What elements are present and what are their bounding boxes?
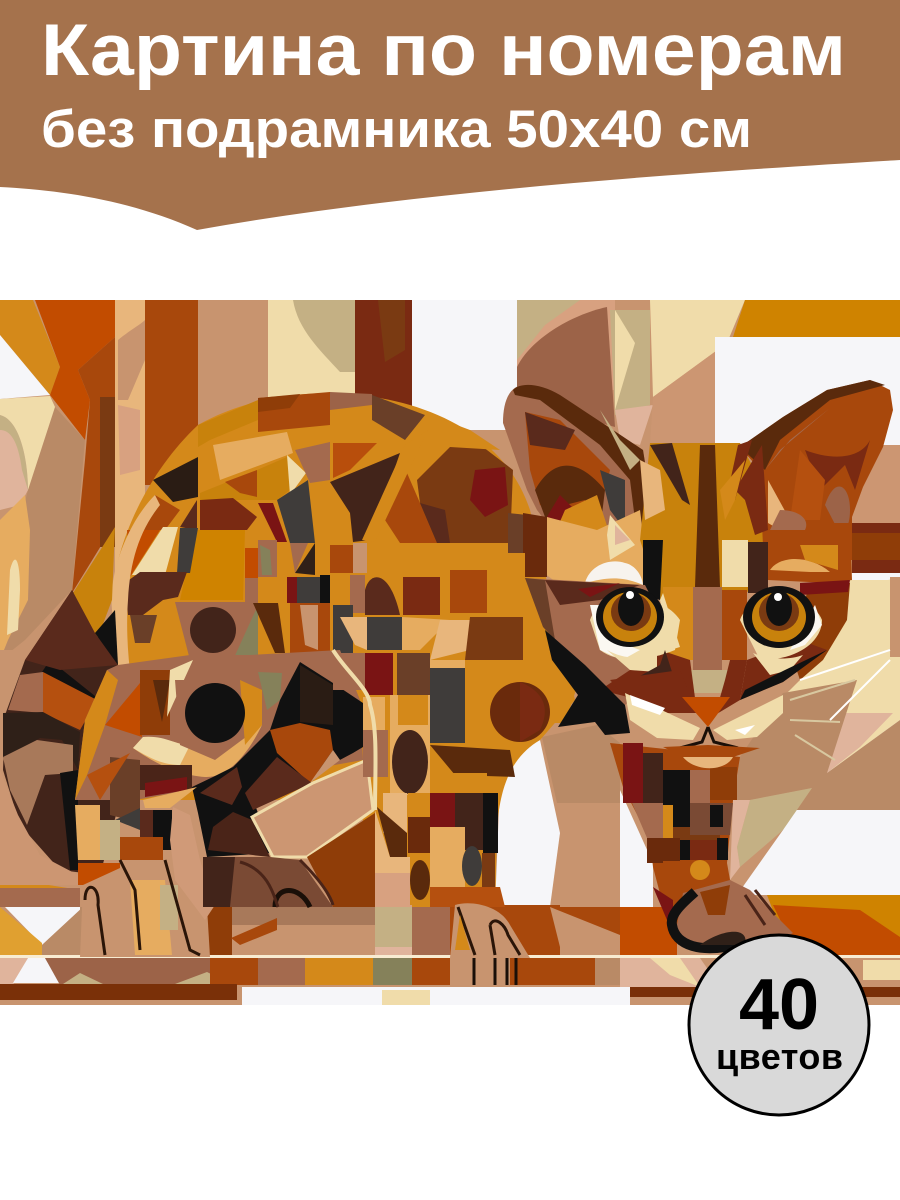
right whisker pad [713, 695, 783, 740]
forehead [640, 443, 765, 600]
left eye [590, 587, 680, 660]
subtitle: без подрамника 50х40 см [41, 100, 752, 159]
body mosaic upper [125, 392, 525, 668]
cat tail [0, 590, 120, 885]
left whisker pad [625, 693, 700, 740]
cat body base [112, 393, 575, 907]
nose [682, 697, 730, 727]
under-eye cream [607, 650, 657, 672]
white brow [585, 561, 643, 585]
below left ear [547, 510, 643, 585]
painting background [0, 300, 900, 1005]
black forehead stripe [643, 540, 663, 600]
badge number: 40 [739, 965, 819, 1045]
title: Картина по номерам [41, 10, 846, 91]
whisker lines [790, 650, 890, 760]
badge: 40 colours [689, 935, 869, 1115]
right face side [797, 583, 850, 680]
centre stripes [663, 587, 693, 660]
right eye [740, 586, 822, 660]
cat head [503, 380, 893, 768]
ledge [0, 885, 900, 1005]
front paw [450, 903, 530, 985]
body mosaic centre [333, 650, 577, 907]
cat front leg [610, 743, 760, 924]
mouth [680, 727, 738, 748]
black stripes [545, 630, 630, 735]
badge label: цветов [716, 1036, 843, 1077]
left ear [503, 386, 645, 526]
left face side [526, 578, 648, 705]
lower block and white arch [495, 725, 653, 907]
body ring and lower [25, 495, 375, 907]
rear paws [80, 807, 333, 957]
painting: abstract cat [0, 300, 900, 1005]
front leg paw [672, 880, 793, 952]
right ear [740, 380, 893, 560]
header banner [0, 0, 900, 230]
